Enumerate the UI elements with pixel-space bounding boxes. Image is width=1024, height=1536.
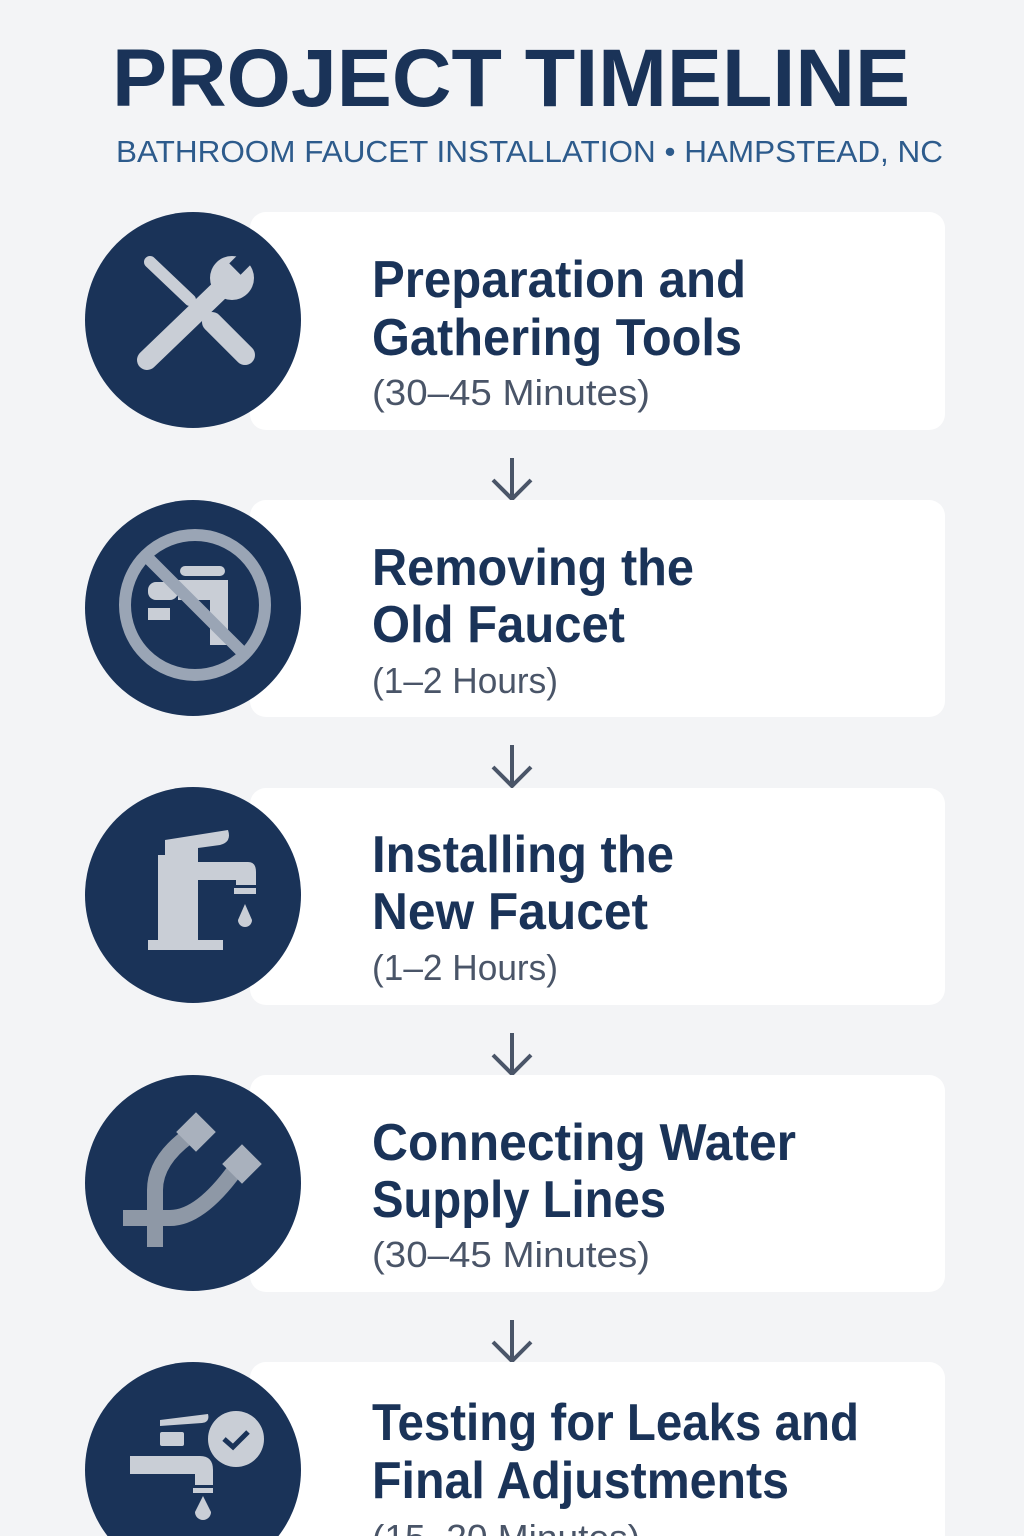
heading: step 2: (1–2 Hours) — [372, 660, 558, 701]
icon: no faucet — [85, 500, 301, 716]
heading: step 4: Connecting Water — [372, 1114, 796, 1172]
icon: new faucet — [85, 787, 301, 1003]
heading: step 1 — [372, 251, 746, 413]
arrow 2 — [493, 745, 531, 786]
heading: step 3 — [372, 826, 674, 988]
subtitle: BATHROOM FAUCET INSTALLATION • HAMPSTEAD, NC — [116, 134, 943, 169]
icon: leak test — [85, 1362, 301, 1536]
arrow 3 — [493, 1033, 531, 1074]
step 2 card — [85, 500, 945, 717]
arrow 1 — [493, 458, 531, 499]
icon: supply lines — [85, 1075, 301, 1291]
heading: step 1: Preparation and — [372, 251, 746, 309]
title: PROJECT TIMELINE — [112, 33, 910, 124]
step 4 card — [85, 1075, 945, 1292]
heading: step 4 — [372, 1114, 796, 1275]
arrow 4 — [493, 1320, 531, 1361]
step 5 card — [85, 1362, 945, 1536]
heading: step 1: (30–45 Minutes) — [372, 372, 650, 413]
heading: step 3: New Faucet — [372, 883, 648, 941]
heading: step 4: (30–45 Minutes) — [372, 1234, 650, 1275]
heading: step 2 — [372, 539, 694, 701]
heading: step 5: Testing for Leaks and — [372, 1394, 859, 1452]
heading: step 5: Final Adjustments — [372, 1452, 789, 1510]
icon: tools — [85, 212, 301, 428]
step 1 card — [85, 212, 945, 430]
heading: step 3: Installing the — [372, 826, 674, 884]
heading: step 3: (1–2 Hours) — [372, 947, 558, 988]
heading: step 4: Supply Lines — [372, 1171, 666, 1229]
heading: step 2: Old Faucet — [372, 596, 625, 654]
heading: step 5 — [372, 1394, 859, 1536]
step 3 card — [85, 787, 945, 1005]
heading: step 2: Removing the — [372, 539, 694, 597]
heading: step 1: Gathering Tools — [372, 309, 742, 367]
